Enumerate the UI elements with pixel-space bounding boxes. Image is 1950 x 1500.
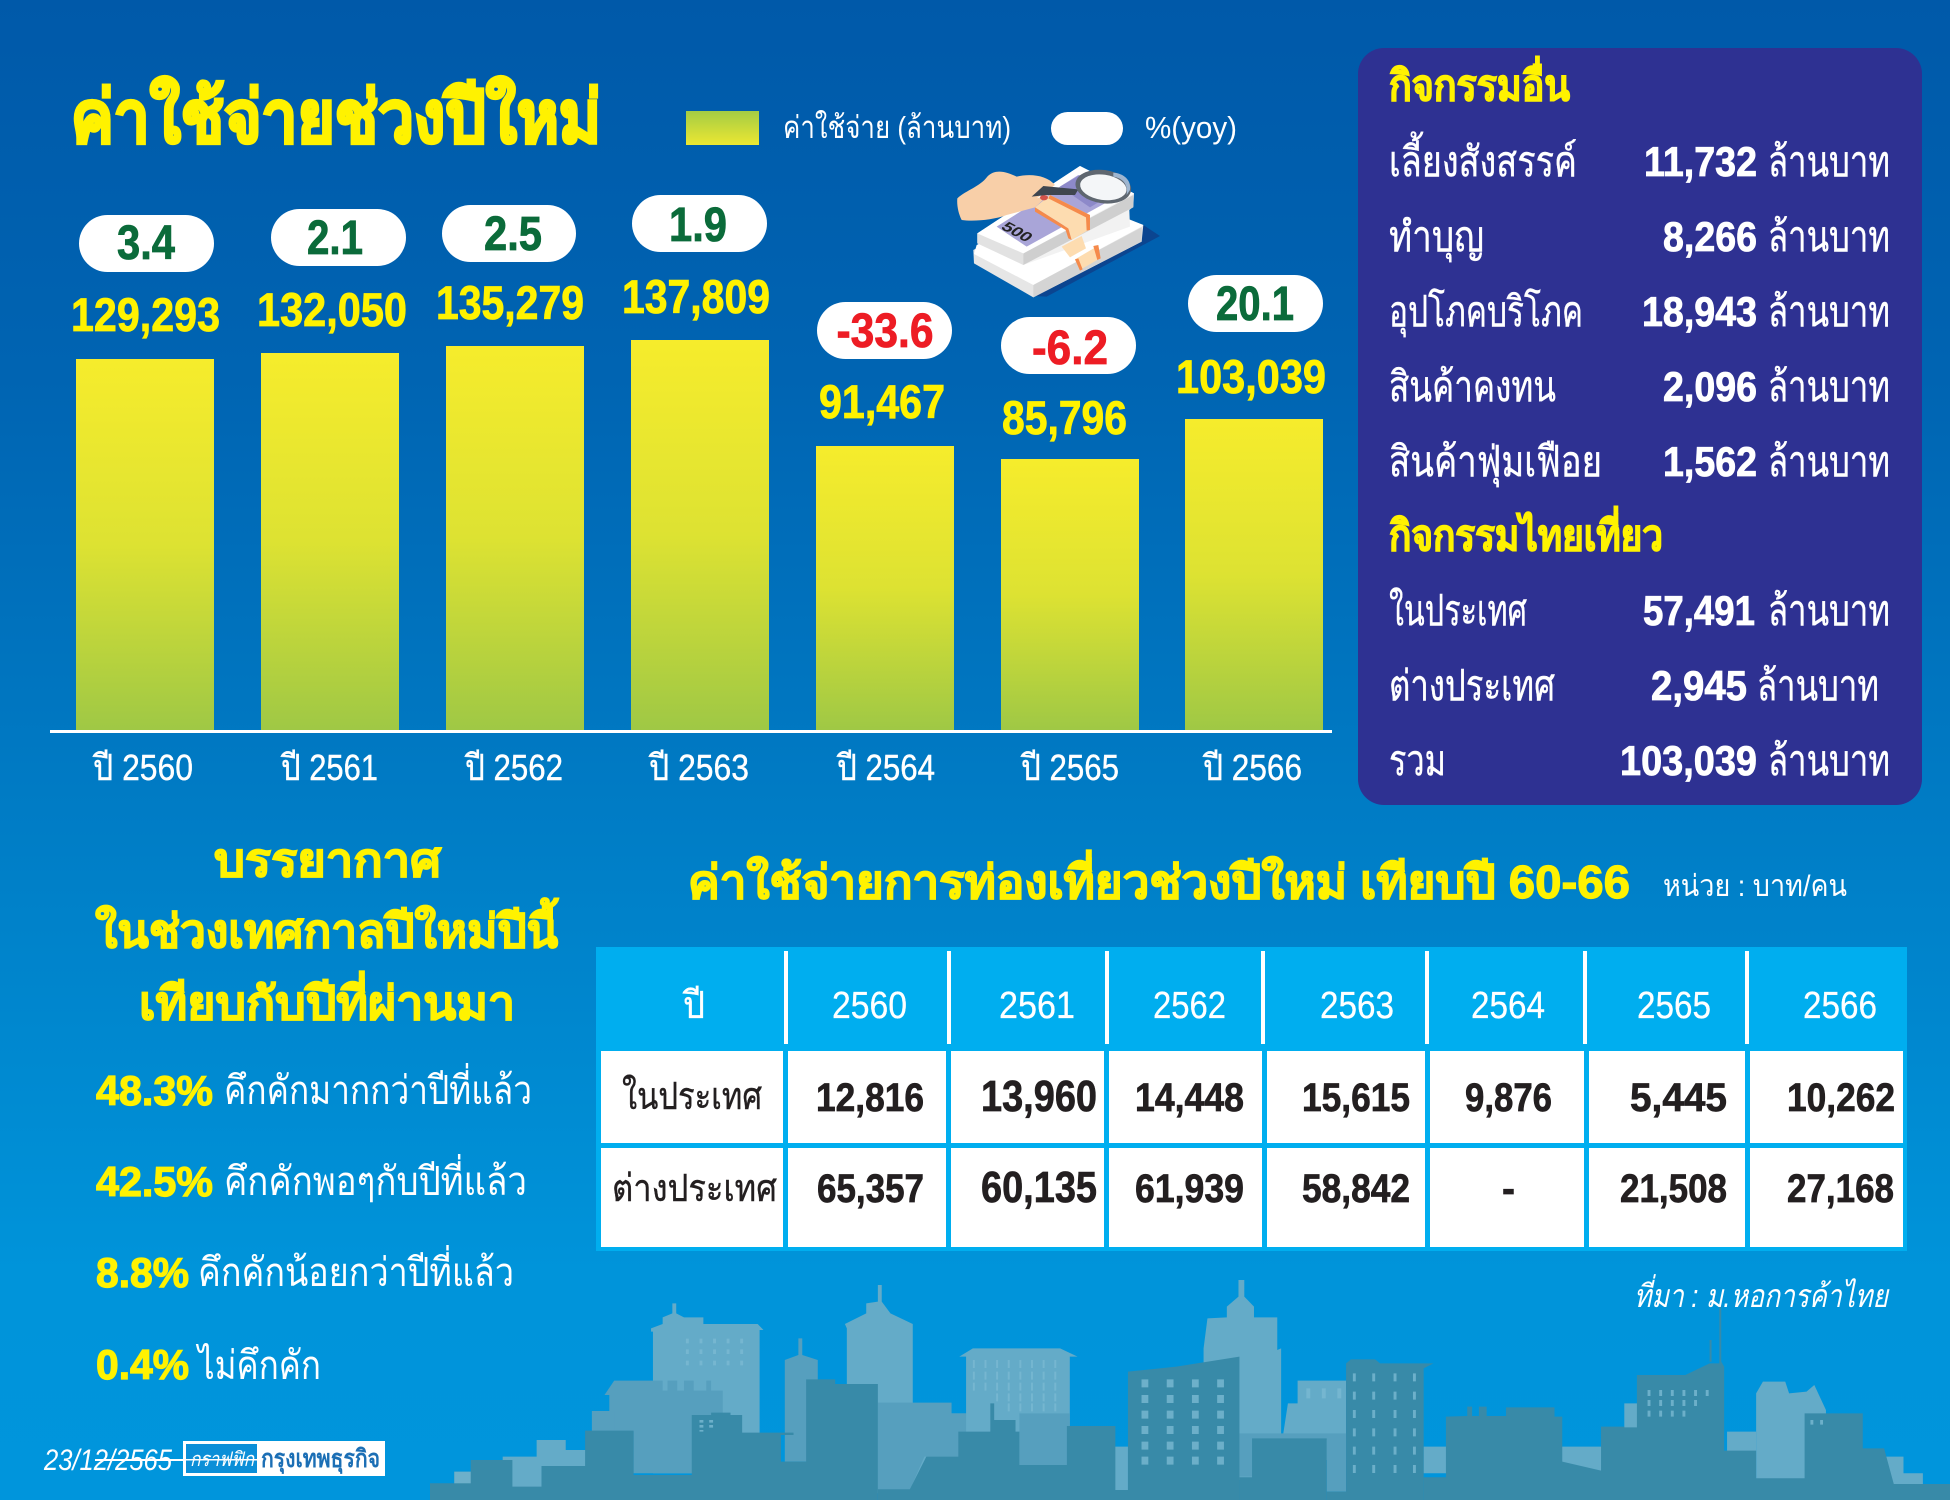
- row: durable goods: สินค้าคงทน: [1389, 363, 1556, 410]
- year axis labels: ปี 2561: [280, 747, 378, 788]
- heading: atmosphere: [95, 834, 559, 1029]
- header row: 2566: [1803, 985, 1877, 1027]
- yoy values: 2.5: [484, 208, 542, 261]
- row: overseas: [612, 1163, 1894, 1212]
- row: merit: ทำบุญ: [1389, 213, 1484, 263]
- table title: ค่าใช้จ่ายการท่องเที่ยวช่วงปีใหม่ เทียบปี 60-66: [688, 850, 1630, 908]
- header separators: [784, 951, 1749, 1044]
- row: overseas: 27,168: [1787, 1167, 1894, 1211]
- legend: %(yoy): [1145, 110, 1237, 145]
- row: domestic: ล้านบาท: [1768, 587, 1890, 634]
- row: durable goods: ล้านบาท: [1768, 363, 1890, 410]
- row: domestic: 15,615: [1302, 1076, 1410, 1120]
- header row: 2565: [1637, 985, 1711, 1027]
- icon: money stack with hand and magnifier: 500: [997, 219, 1036, 245]
- row: domestic: [622, 1072, 1895, 1121]
- row: domestic: 13,960: [981, 1072, 1097, 1121]
- yoy values: 2.1: [307, 212, 363, 265]
- icon: money stack with hand and magnifier: [957, 166, 1160, 297]
- unit note: หน่วย : บาท/คน: [1663, 870, 1847, 903]
- item 48.3%: 48.3%: [96, 1067, 213, 1114]
- row: overseas: [1389, 662, 1879, 709]
- heading: atmosphere: บรรยากาศ: [214, 834, 442, 886]
- row: consumer goods: ล้านบาท: [1768, 288, 1890, 335]
- row: overseas: 60,135: [981, 1163, 1097, 1212]
- yoy values: 3.4: [117, 217, 175, 270]
- row: durable goods: 2,096: [1663, 363, 1757, 410]
- row: luxury goods: ล้านบาท: [1768, 438, 1890, 485]
- row: total: ล้านบาท: [1768, 737, 1890, 784]
- spending table: [596, 947, 1907, 1251]
- header row: 2560: [832, 985, 907, 1027]
- row: overseas: 21,508: [1620, 1167, 1727, 1211]
- row: merit: ล้านบาท: [1768, 213, 1890, 260]
- value labels: 91,467: [819, 375, 945, 428]
- row: domestic: 5,445: [1630, 1076, 1727, 1120]
- year axis labels: ปี 2562: [464, 747, 563, 788]
- row: consumer goods: 18,943: [1642, 288, 1757, 335]
- legend: [686, 110, 1237, 145]
- item 8.8%: 8.8%: [96, 1249, 189, 1296]
- value labels: 103,039: [1176, 350, 1326, 403]
- table cells: [601, 1051, 1903, 1247]
- publisher logo: [183, 1441, 385, 1476]
- item 0.4%: 0.4%: [96, 1341, 189, 1388]
- axis line: [50, 730, 1332, 733]
- title: ค่าใช้จ่ายช่วงปีใหม่: [71, 75, 601, 158]
- item 48.3%: คึกคักมากกว่าปีที่แล้ว: [224, 1063, 532, 1113]
- row: overseas: ล้านบาท: [1757, 662, 1879, 709]
- row: merit: [1389, 213, 1890, 263]
- year axis labels: ปี 2565: [1020, 747, 1119, 788]
- heading: tourism activities: กิจกรรมไทยเที่ยว: [1389, 506, 1663, 559]
- skyline illustration: [430, 1280, 1950, 1500]
- row: overseas: 2,945: [1651, 662, 1747, 709]
- row: overseas: ต่างประเทศ: [1389, 662, 1555, 709]
- row: domestic: 10,262: [1787, 1076, 1895, 1120]
- row: domestic: 12,816: [816, 1076, 924, 1120]
- item 42.5%: 42.5%: [96, 1158, 213, 1205]
- item 0.4%: ไม่คึกคัก: [196, 1343, 321, 1388]
- row: overseas: ต่างประเทศ: [612, 1168, 777, 1210]
- row: party: [1389, 131, 1890, 185]
- item 42.5%: [96, 1154, 527, 1205]
- yoy pills: [79, 195, 1323, 374]
- row: domestic: 9,876: [1465, 1076, 1552, 1120]
- row: total: 103,039: [1620, 737, 1757, 784]
- panel: other activities and tourism: [1358, 48, 1922, 805]
- header row: ปี: [682, 985, 705, 1027]
- year axis labels: ปี 2560: [92, 747, 193, 788]
- item 8.8%: คึกคักน้อยกว่าปีที่แล้ว: [198, 1245, 514, 1295]
- row: overseas: 65,357: [817, 1167, 924, 1211]
- legend swatch: spending: [686, 111, 759, 145]
- legend swatch: yoy: [1051, 112, 1123, 145]
- publisher logo: กรุงเทพธุรกิจ: [261, 1445, 380, 1475]
- value labels: 129,293: [71, 288, 220, 341]
- value labels: 132,050: [257, 283, 407, 336]
- year axis labels: [92, 747, 1302, 788]
- row: domestic: [1389, 587, 1890, 634]
- header row: 2561: [999, 985, 1075, 1027]
- item 8.8%: [96, 1245, 514, 1296]
- row: luxury goods: 1,562: [1663, 438, 1757, 485]
- row: luxury goods: [1389, 438, 1890, 488]
- row: overseas: 58,842: [1302, 1167, 1410, 1211]
- heading: other activities: กิจกรรมอื่น: [1389, 56, 1570, 109]
- date stamp: 23/12/2565: [43, 1444, 172, 1477]
- publisher logo: กราฟฟิก: [190, 1449, 255, 1471]
- header row: 2564: [1471, 985, 1545, 1027]
- yoy values: [117, 199, 1294, 375]
- row: total: [1389, 737, 1890, 784]
- atmosphere list: [96, 1063, 532, 1388]
- row: consumer goods: อุปโภคบริโภค: [1389, 287, 1583, 338]
- item 42.5%: คึกคักพอๆกับปีที่แล้ว: [224, 1154, 527, 1204]
- row: merit: 8,266: [1663, 213, 1757, 260]
- row: overseas: 61,939: [1135, 1167, 1244, 1211]
- header row: 2563: [1320, 985, 1394, 1027]
- bar chart: [50, 195, 1332, 788]
- row: durable goods: [1389, 363, 1890, 410]
- year axis labels: ปี 2566: [1202, 747, 1302, 788]
- row: domestic: ในประเทศ: [1389, 587, 1527, 634]
- row: party: เลี้ยงสังสรรค์: [1389, 131, 1577, 185]
- value labels: 85,796: [1002, 391, 1127, 444]
- row: party: ล้านบาท: [1768, 138, 1890, 185]
- heading: atmosphere: ในช่วงเทศกาลปีใหม่ปีนี้: [95, 897, 559, 957]
- heading: atmosphere: เทียบกับปีที่ผ่านมา: [139, 971, 515, 1029]
- row: party: 11,732: [1644, 138, 1757, 185]
- row: consumer goods: [1389, 287, 1890, 338]
- source note: ที่มา : ม.หอการค้าไทย: [1634, 1274, 1890, 1314]
- year axis labels: ปี 2563: [648, 747, 749, 788]
- legend: ค่าใช้จ่าย (ล้านบาท): [783, 110, 1011, 145]
- yoy values: -33.6: [836, 305, 934, 358]
- header row: [682, 985, 1877, 1027]
- row: domestic: 14,448: [1135, 1076, 1244, 1120]
- row: domestic: ในประเทศ: [622, 1075, 762, 1118]
- yoy values: 1.9: [669, 199, 727, 252]
- row: total: รวม: [1389, 737, 1446, 784]
- row: luxury goods: สินค้าฟุ่มเฟือย: [1389, 438, 1602, 488]
- item 0.4%: [96, 1341, 321, 1388]
- bars: [76, 340, 1323, 730]
- value labels: 137,809: [622, 270, 770, 323]
- header row: 2562: [1153, 985, 1226, 1027]
- value labels: 135,279: [436, 276, 584, 329]
- year axis labels: ปี 2564: [836, 747, 935, 788]
- value labels: [71, 270, 1326, 444]
- yoy values: -6.2: [1032, 322, 1108, 375]
- yoy values: 20.1: [1216, 278, 1294, 331]
- row: domestic: 57,491: [1643, 587, 1755, 634]
- item 48.3%: [96, 1063, 532, 1114]
- row: overseas: -: [1502, 1167, 1515, 1211]
